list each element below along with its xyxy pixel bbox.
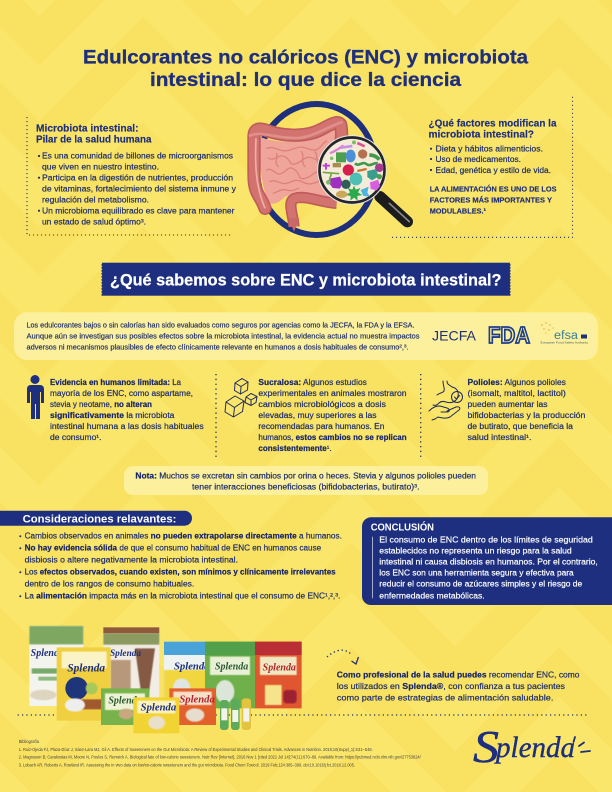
text: sucralosa: Sucralosa: Algunos estudios [258,378,367,387]
callout: alimentación modulable: MODULABLES.¹ [430,206,486,215]
logo: Splenda: plenda [494,731,575,764]
heading: factores: ¿Qué factores modifican la [428,119,557,130]
pack: red pouch [255,642,302,708]
bibliography: 1. Ruiz-Ojeda FJ, Plaza-Díaz J, Sáez-Lara MJ, Gil A. Effects of Sweeteners on the Gut Microbiota: A Review of Experimental Studies and Clinical Trials. Advances in Nutrition. 2019;10(Suppl_1):S31–S48. [19,747,373,752]
text: recomendación profesional [337,670,580,702]
text: evidencia: significativamente la microbiota [50,411,175,420]
bullet list: factores [430,144,551,175]
pack: Granulada bag [57,647,111,721]
box: yellow [133,697,179,733]
text: sucralosa: recomendadas para humanos. En [258,422,384,431]
bullet list: consideraciones: disbiosis o altere negativamente la microbiota intestinal. [25,555,238,564]
icon: sugar cubes [225,378,257,417]
bullet list: microbiota: regulación del metabolismo. [42,195,149,204]
bibliography: Bibliografía [19,739,39,744]
box: green [101,688,149,725]
bibliography [19,739,421,768]
callout: alimentación modulable [430,184,556,215]
column: evidencia en humanos [27,375,204,442]
text: conclusión: intestinal ni causa disbiosis en humanos. Por el contrario, [379,558,598,567]
panel: conclusión [362,517,612,605]
logo: Splenda [473,721,590,772]
heading tab: Consideraciones relavantes: [23,513,176,525]
heading: pilar de la salud humana: Microbiota intestinal: [36,124,138,135]
box: orange [169,688,216,725]
text: recomendación profesional: Como profesional de la salud puedes recomendar ENC, como [337,670,580,680]
logo: EFSA [540,322,589,344]
box: green: Splenda [108,695,142,706]
callout: alimentación modulable: LA ALIMENTACIÓN ES UNO DE LOS [430,184,556,193]
heading tab [0,511,192,526]
pack: Aguave pouch [29,626,83,706]
heading: pilar de la salud humana: Pilar de la salud humana [36,135,152,146]
text: conclusión [379,536,598,600]
text: sucralosa: humanos, estos cambios no se replican [258,433,407,442]
bullet list: factores: Uso de medicamentos. [436,155,521,164]
text: polioles [468,378,585,442]
icon: intestine [250,122,342,232]
text: sucralosa: consistentemente¹. [258,444,332,453]
bottles [220,698,251,730]
pack: blue refill: Splenda [174,661,210,672]
title [83,47,528,91]
panel: factores que modifican la microbiota [392,95,572,237]
text: polioles: Polioles: Algunos polioles [468,378,566,387]
text: agencias [26,323,420,352]
text: sucralosa [258,378,407,453]
pack: green refill: Splenda [215,661,248,672]
text: evidencia [50,378,204,442]
product photo: Splenda range [29,626,302,733]
bullet list: microbiota: Un microbioma equilibrado es clave para mantener [42,206,235,215]
text: agencias: adversos ni mecanismos plausibles de efecto clínicamente relevante en humanos a dosis habituales de consumo²,³. [26,345,409,352]
bibliography: 3. Lobach AR, Roberts A, Rowland IR. Assessing the in vivo data on low/no-calorie sweeteners and the gut microbiota. Food Chem Toxicol. 2019 Feb;124:385–399. doi:10.1016/j.fct.2018.12.005. [19,763,355,768]
text: agencias: Los edulcorantes bajos o sin calorías han sido evaluados como seguros por agencias como la JECFA, la FDA y la EFSA. [26,323,415,330]
pack: Granulada bag: Splenda [67,663,105,675]
text: evidencia: mayoría de los ENC, como aspartame, [50,389,193,398]
logo: FDA: FDA [488,322,530,348]
box: orange: Splenda [179,694,216,705]
callout: nota: tener interacciones beneficiosas (bifidobacterias, butirato)³. [192,482,420,491]
text: conclusión: establecidos no representa un riesgo para la salud [379,547,572,556]
logo: EFSA: efsa [554,330,579,342]
bullet list: consideraciones: La alimentación impacta más en la microbiota intestinal que el consumo de ENC¹,²,³. [25,592,340,600]
ring [257,104,376,235]
icon: magnifying glass with microbes [318,136,409,222]
bullet list: consideraciones: No hay evidencia sólida de que el consumo habitual de ENC en humanos cause [25,543,322,552]
panel: conclusión: CONCLUSIÓN [371,520,434,533]
logo: JECFA: JECFA [432,328,477,344]
text: conclusión: los ENC son una herramienta segura y efectiva para [379,569,574,578]
column: polioles [429,378,585,442]
banner heading [102,263,510,296]
text: recomendación profesional: como parte de estrategias de alimentación saludable. [337,692,553,702]
banner heading: ¿Qué sabemos sobre ENC y microbiota intestinal? [110,272,502,290]
text: evidencia: Evidencia en humanos limitada: La [50,378,182,387]
callout: nota [124,466,488,495]
bullet list: consideraciones: dentro de los rangos de consumo habituales. [25,579,194,588]
text: recomendación profesional: los utilizados en Splenda® , con confianza a tus pacientes [337,681,565,691]
text: polioles: salud intestinal¹. [468,433,532,442]
box: yellow: Splenda [141,703,177,714]
panel: microbiota intestinal [27,117,236,235]
bullet list: microbiota [38,151,236,226]
pack: Mocha pouch: Splenda [110,649,141,659]
column: sucralosa [225,378,407,453]
title: Edulcorantes no calóricos (ENC) y microbiota [83,47,528,68]
text: conclusión: enfermedades metabólicas. [379,591,485,600]
pack: Mocha pouch [103,627,159,698]
bullet list: consideraciones: Los efectos observados, cuando existen, son mínimos y clínicamente irrelevantes [25,567,336,576]
heading: factores: microbiota intestinal? [428,130,534,140]
icon: stomach on hand [429,381,462,420]
text: sucralosa: cambios microbiológicos a dosis [258,400,386,409]
icon: person [27,375,44,419]
bullet list: microbiota: Es una comunidad de billones de microorganismos [42,151,233,160]
arrow: dotted curved [327,650,358,664]
bullet list: microbiota: Participa en la digestión de nutrientes, producción [42,173,233,182]
bibliography: 2. Magnuson B, Carakostas M, Moore N, Poulos S, Renwick A. Biological fate of low-calorie sweeteners. Nutr Rev [Internet]. 2016 Nov 1 [cited 2021 Jul 14];74(11):670–89. Available from: https://pubmed.ncbi.nlm.nih.gov/27753624/ [19,755,421,760]
bullet list: factores: Dieta y hábitos alimenticios. [436,144,543,153]
bullet list: factores: Edad, genética y estilo de vida. [436,166,551,175]
bullet list: consideraciones: Cambios observados en animales no pueden extrapolarse directamente a humanos. [25,531,342,540]
callout: alimentación modulable: FACTORES MÁS IMPORTANTES Y [430,195,552,204]
text: evidencia: stevia y neotame, no alteran [50,400,152,409]
logo: EFSA: European Food Safety Authority [540,340,589,344]
text: conclusión: reducir el consumo de azúcares simples y el riesgo de [379,580,583,589]
text: polioles: bifidobacterias y la producción [468,411,585,420]
callout: nota: Nota: Muchos se excretan sin cambios por orina o heces. Stevia y algunos polioles pueden [135,471,476,480]
title: intestinal: lo que dice la ciencia [150,70,461,91]
bullet list: consideraciones [19,531,342,600]
text: agencias: Aunque aún se investigan sus posibles efectos sobre la microbiota intestinal, la evidencia actual no muestra impactos [26,334,420,340]
text: polioles: pueden aumentar las [468,400,548,409]
panel: evaluación de seguridad [14,312,598,360]
pack: green refill [205,642,255,708]
bullet list: microbiota: un estado de salud óptimo³. [42,217,146,226]
heading: factores [428,119,557,140]
text: polioles: (isomalt, maltitol, lactitol) [468,389,566,398]
illustration: intestine under magnifier [250,104,409,235]
pack: blue refill [164,642,210,700]
text: polioles: de butirato, que beneficia la [468,422,573,431]
text: evidencia: intestinal humana a las dosis habituales [50,422,204,431]
pack: Aguave pouch: Splenda [31,648,64,659]
logo: Splenda: S [473,721,499,772]
bullet list: microbiota: de vitaminas, fortalecimiento del sistema inmune y [42,184,236,193]
heading: pilar de la salud humana [36,124,152,146]
text: sucralosa: elevadas, muy superiores a las [258,411,377,420]
pack: red pouch: Splenda [263,663,296,674]
text: sucralosa: experimentales en animales mostraron [258,389,407,398]
text: conclusión: El consumo de ENC dentro de los límites de seguridad [379,536,593,545]
bullet list: microbiota: que viven en nuestro intestino. [42,162,159,171]
panel: consideraciones relevantes [0,511,342,600]
text: evidencia: de consumo¹. [50,433,102,442]
